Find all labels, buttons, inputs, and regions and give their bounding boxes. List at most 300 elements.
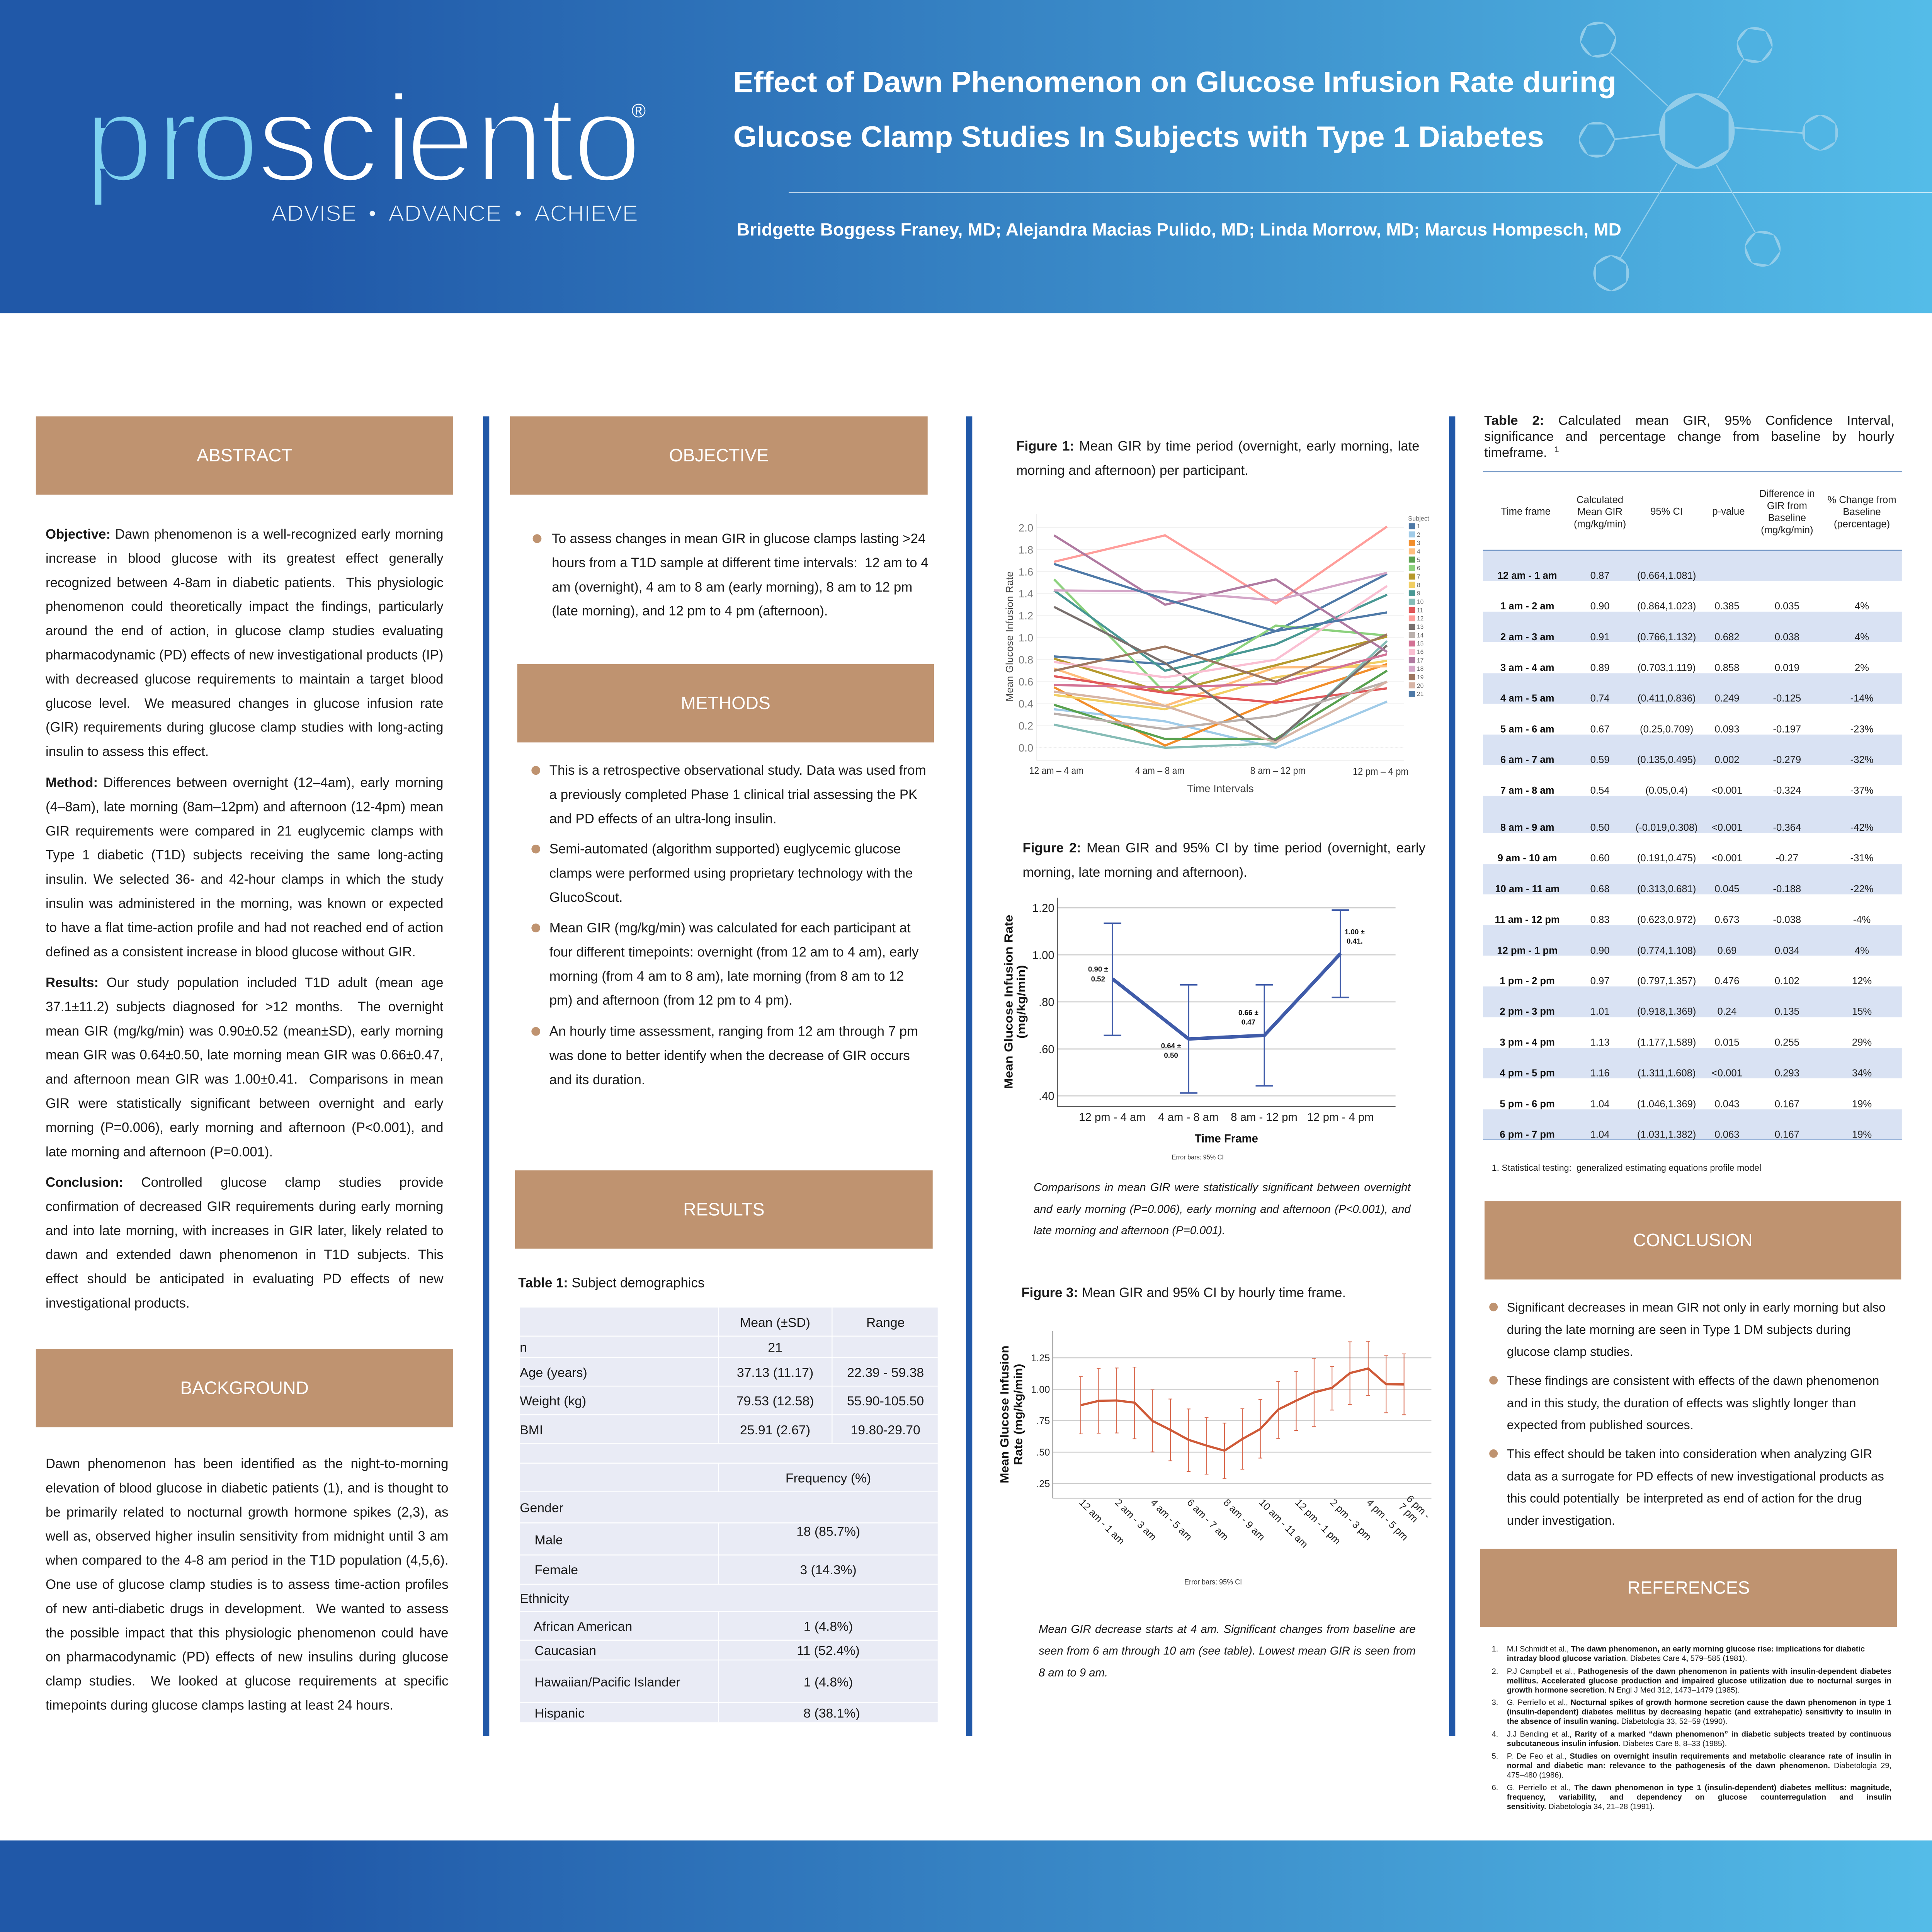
text: abstract results: mean GIR was 0.64±0.50, late morning mean GIR was 0.66±0.47, (46, 1048, 443, 1063)
x axis labels: 12 am – 4 am (1029, 765, 1083, 776)
table 2 difference column: 0.167 (1775, 1098, 1799, 1109)
table 1: subject demographics: Mean (±SD) (740, 1315, 810, 1330)
table 1: subject demographics: 1 (4.8%) (804, 1674, 853, 1689)
table 2 confidence interval column: (0.313,0.681) (1637, 883, 1696, 894)
table 2 caption: significance and percentage change from baseline by hourly (1484, 429, 1894, 444)
table 2 time frame column: 12 am - 1 am (1498, 570, 1557, 581)
text: abstract results: Results: Our study population included T1D adult (mean age (46, 975, 443, 990)
table 2 header: Baseline (1843, 506, 1881, 517)
table 2 difference column: -0.27 (1776, 852, 1798, 864)
table 2 time frame column: 8 am - 9 am (1500, 821, 1554, 833)
text: abstract conclusion: effect should be anticipated in evaluating PD effects of new (46, 1271, 443, 1286)
heading: abstract: ABSTRACT (197, 445, 292, 465)
table 2 confidence interval column: (0.191,0.475) (1637, 852, 1696, 864)
bullet: methods study design: a previously completed Phase 1 clinical trial assessing the PK (549, 787, 917, 802)
text: 3. (1492, 1698, 1498, 1707)
logo tagline (271, 201, 638, 226)
text: abstract objective: glucose level. We measured changes in glucose infusion rate (46, 696, 443, 711)
text: abstract results: morning (P=0.006), early morning and afternoon (P<0.001), and (46, 1120, 443, 1135)
x axis labels: 4 am - 8 am (1158, 1111, 1219, 1124)
mean line (1112, 954, 1340, 1039)
y axis ticks: .50 (1036, 1447, 1050, 1458)
error bars (1104, 910, 1349, 1093)
text: abstract method: GIR requirements were compared in 21 euglycemic clamps with (46, 823, 443, 838)
table 2 header (1501, 488, 1896, 536)
logo tagline: ADVISE (271, 201, 357, 226)
table 2 percent change column: 34% (1852, 1067, 1872, 1078)
logo tagline: ACHIEVE (534, 201, 638, 226)
reference 5: P. De Feo et al., Studies on overnight insulin requirements and metabolic clearance rate of insulin in (1507, 1752, 1891, 1760)
y axis ticks: 0.6 (1019, 676, 1033, 688)
x axis title: Time Frame (1195, 1132, 1258, 1145)
table 2 time frame column: 5 pm - 6 pm (1500, 1098, 1555, 1109)
text: abstract method: insulin. We selected 36- and 42-hour clamps in which the study (46, 872, 443, 887)
legend: subject: Subject (1408, 515, 1429, 522)
y axis ticks (1019, 522, 1033, 754)
table 1: subject demographics: 55.90-105.50 (847, 1393, 924, 1408)
table 2 calculated mean column: 0.87 (1590, 570, 1610, 581)
table 2 percent change column: 19% (1852, 1098, 1872, 1109)
table 1 caption: Table 1: Subject demographics (518, 1276, 704, 1291)
bullet: objective: hours from a T1D sample at different time intervals: 12 am to 4 (552, 555, 929, 570)
x axis labels: 12 pm - 4 am (1079, 1111, 1146, 1124)
table 2 calculated mean column: 0.91 (1590, 631, 1610, 643)
text: abstract method: insulin was administered in the morning, was known or expected (46, 896, 443, 911)
table 1: subject demographics: Male (534, 1532, 563, 1547)
table 2 confidence interval column: (0.05,0.4) (1645, 784, 1688, 796)
bullet: objective: To assess changes in mean GIR in glucose clamps lasting >24 (552, 531, 925, 546)
x axis labels (1079, 1111, 1374, 1124)
text: abstract method: (4–8am), late morning (8am–12pm) and afternoon (12-4pm) mean (46, 799, 443, 815)
y axis ticks: 0.8 (1019, 654, 1033, 666)
table 1: subject demographics: BMI (520, 1422, 543, 1437)
legend: subject: 15 (1417, 641, 1423, 647)
table 1: subject demographics: 25.91 (2.67) (740, 1422, 810, 1437)
table 2 p-value column: 0.015 (1714, 1036, 1739, 1048)
text: abstract objective: increase in blood glucose with its greatest effect generally (46, 551, 443, 566)
table 1: subject demographics: Weight (kg) (520, 1393, 586, 1408)
table 2 confidence interval column: (0.25,0.709) (1640, 723, 1693, 735)
bullet: conclusion consistency: and in this study, the duration of effects was slightly longer than (1507, 1396, 1856, 1410)
legend: subject: 1 (1417, 523, 1420, 530)
figure 2 note (1034, 1177, 1411, 1242)
table 2 percent change column: -42% (1850, 821, 1873, 833)
text: background: clamp studies. We looked at glucose requirements at specific (46, 1673, 448, 1689)
table 1: subject demographics: 8 (38.1%) (803, 1706, 860, 1720)
reference 4: subcutaneous insulin infusion. Diabetes Care 8, 8–33 (1985). (1507, 1740, 1727, 1748)
table 2 time frame column: 4 am - 5 am (1500, 692, 1554, 704)
table 1: subject demographics: 11 (52.4%) (797, 1643, 860, 1658)
table 2 header: Time frame (1501, 506, 1551, 517)
value labels: 0.66 ± (1238, 1009, 1259, 1017)
figure 3 note: Mean GIR decrease starts at 4 am. Significant changes from baseline are (1039, 1622, 1416, 1636)
table 1: subject demographics: Female (534, 1562, 578, 1577)
table 2 percent change column: -4% (1853, 914, 1871, 925)
value labels: 0.64 ± (1161, 1042, 1181, 1050)
table 2 percent change column: 2% (1855, 662, 1869, 673)
bullet: methods hourly assessment: An hourly time assessment, ranging from 12 am through 7 pm (549, 1024, 918, 1039)
figure 3 note: 8 am to 9 am. (1039, 1666, 1108, 1679)
table 2 percent change column: 4% (1855, 945, 1869, 956)
table 2 header: Difference in (1759, 488, 1815, 499)
table 1: subject demographics: 21 (768, 1340, 782, 1355)
figure 2 note: and early morning (P=0.006), early morning and afternoon (P<0.001), and (1034, 1202, 1411, 1215)
table 2 difference column: 0.034 (1775, 945, 1799, 956)
legend: subject: 21 (1417, 691, 1423, 697)
table 2 time frame column: 9 am - 10 am (1498, 852, 1557, 864)
text: 1. (1492, 1645, 1498, 1653)
table 2 header: Baseline (1768, 512, 1806, 523)
table 2 footnote: 1. Statistical testing: generalized estimating equations profile model (1492, 1163, 1761, 1173)
table 2 difference column: -0.279 (1773, 754, 1801, 765)
bullet: methods hourly assessment: and its duration. (549, 1072, 645, 1087)
value labels: 0.90 ± (1088, 965, 1108, 973)
table 2: hourly GIR statistics (1478, 469, 1906, 1145)
heading: background (36, 1349, 453, 1427)
figure 2 note: late morning and afternoon (P=0.001). (1034, 1224, 1225, 1237)
table 2 time frame column: 1 pm - 2 pm (1500, 975, 1555, 986)
table 2 percent change column (1850, 600, 1873, 1140)
legend: subject: 7 (1417, 573, 1420, 580)
table 2 calculated mean column: 0.54 (1590, 784, 1610, 796)
table 2 p-value column: <0.001 (1712, 1067, 1742, 1078)
reference 4: J.J Bending et al., Rarity of a marked “dawn phenomenon” in diabetic subjects treated by continuous (1507, 1730, 1891, 1739)
table 2 difference column (1773, 600, 1801, 1140)
text: abstract results: mean GIR (mg/kg/min) was 0.90±0.52 (mean±SD), early morning (46, 1024, 443, 1039)
table 2 calculated mean column: 0.60 (1590, 852, 1610, 864)
table 1: subject demographics (516, 1305, 940, 1725)
text: abstract method: Type 1 diabetic (T1D) subjects receiving the same long-acting (46, 848, 443, 863)
heading: objective: OBJECTIVE (669, 445, 769, 465)
legend: subject: 6 (1417, 565, 1420, 571)
y axis ticks: 0.0 (1019, 742, 1033, 754)
figure 2: mean GIR line chart with error bars (990, 881, 1446, 1163)
text: abstract results: GIR were statistically significant between overnight and early (46, 1096, 443, 1111)
table 2 confidence interval column (1636, 570, 1698, 1140)
y axis ticks: 1.4 (1019, 588, 1033, 600)
legend: subject: 14 (1417, 633, 1424, 639)
table 2 percent change column: 29% (1852, 1036, 1872, 1048)
x axis labels: 6 am - 7 am (1185, 1497, 1231, 1543)
text: abstract objective: insulin to assess this effect. (46, 744, 209, 759)
table 2 confidence interval column: (0.797,1.357) (1637, 975, 1696, 986)
figure 3 caption: Figure 3: Mean GIR and 95% CI by hourly time frame. (1021, 1285, 1346, 1300)
legend: subject: 13 (1417, 624, 1423, 631)
logo wordmark (84, 68, 646, 208)
text: abstract results: late morning and afternoon (P=0.001). (46, 1144, 273, 1159)
table 2 caption: Table 2: Calculated mean GIR, 95% Confidence Interval, (1484, 413, 1894, 428)
bullet: methods mean GIR: pm) and afternoon (from 12 pm to 4 pm). (549, 993, 793, 1008)
heading: methods (517, 664, 934, 742)
heading: objective (510, 416, 928, 495)
title: Glucose Clamp Studies In Subjects with Type 1 Diabetes (733, 120, 1544, 153)
bullet: methods clamps: Semi-automated (algorithm supported) euglycemic glucose (549, 842, 901, 857)
table 2 time frame column: 7 am - 8 am (1500, 784, 1554, 796)
text: background: the possible impact that this physiologic phenomenon could have (46, 1625, 448, 1640)
table 2 calculated mean column: 1.13 (1590, 1036, 1610, 1048)
x axis labels (1077, 1493, 1432, 1550)
figure 2 caption (1022, 836, 1425, 884)
table 2 calculated mean column: 0.83 (1590, 914, 1610, 925)
bullet: methods mean GIR: four different timepoints: overnight (from 12 am to 4 am), early (549, 944, 918, 960)
table 2 confidence interval column: (-0.019,0.308) (1636, 821, 1698, 833)
table 2 header: % Change from (1827, 494, 1896, 505)
legend: subject: 17 (1417, 658, 1423, 664)
value labels: 0.50 (1164, 1051, 1178, 1060)
value labels: 0.41. (1347, 937, 1363, 945)
table 1: subject demographics: Hispanic (534, 1706, 585, 1720)
legend: subject: 2 (1417, 532, 1420, 538)
table 1: subject demographics: 79.53 (12.58) (736, 1393, 814, 1408)
x axis labels: 2 am - 3 am (1113, 1497, 1159, 1543)
y axis ticks: 1.0 (1019, 632, 1033, 644)
table 2 header: 95% CI (1650, 506, 1683, 517)
title: Effect of Dawn Phenomenon on Glucose Infusion Rate during (733, 65, 1616, 99)
reference 6: G. Perriello et al., The dawn phenomenon in type 1 (insulin-dependent) diabetes mellitus: magnitude, (1507, 1784, 1891, 1792)
table 2 calculated mean column: 1.01 (1590, 1006, 1610, 1017)
reference 6: frequency, variability, and dependency on glucose counterregulation and insulin (1507, 1793, 1891, 1801)
legend: subject: 16 (1417, 649, 1423, 656)
table 2 difference column: -0.188 (1773, 883, 1801, 894)
table 2 difference column: -0.125 (1773, 692, 1801, 704)
table 2 calculated mean column: 0.89 (1590, 662, 1610, 673)
table 2 percent change column: -14% (1850, 692, 1873, 704)
bullet: methods hourly assessment (549, 1019, 918, 1092)
y axis ticks: 1.25 (1031, 1352, 1050, 1364)
table 2 calculated mean column: 0.50 (1590, 821, 1610, 833)
table 2 time frame column: 6 am - 7 am (1500, 754, 1554, 765)
legend: subject: 12 (1417, 616, 1423, 622)
table 2 p-value column: 0.858 (1714, 662, 1739, 673)
table 2 confidence interval column: (0.774,1.108) (1637, 945, 1696, 956)
table 2 calculated mean column: 0.97 (1590, 975, 1610, 986)
table 2 calculated mean column: 0.68 (1590, 883, 1610, 894)
table 1: subject demographics: 37.13 (11.17) (737, 1365, 813, 1380)
y axis ticks (1032, 901, 1054, 1102)
table 2 time frame column: 2 am - 3 am (1500, 631, 1554, 643)
text: abstract conclusion: and into late morning, with increases in GIR later, likely related to (46, 1223, 443, 1238)
text: abstract objective: Objective: Dawn phenomenon is a well-recognized early morning (46, 527, 443, 542)
text: abstract objective (46, 522, 443, 764)
legend: subject: 5 (1417, 557, 1420, 563)
y axis ticks: 1.00 (1032, 949, 1054, 962)
text: abstract objective: (GIR) requirements during glucose clamp studies with long-acting (46, 720, 443, 735)
table 2 header: Calculated (1577, 494, 1623, 505)
bullet: objective: am (overnight), 4 am to 8 am (early morning), 8 am to 12 pm (552, 580, 912, 595)
figure 3: hourly mean GIR line chart (990, 1321, 1446, 1604)
table 2 difference column: 0.167 (1775, 1129, 1799, 1140)
table 2 p-value column: <0.001 (1712, 821, 1742, 833)
table 1: subject demographics: 18 (85.7%) (796, 1524, 860, 1539)
bullet: methods clamps: clamps were performed using proprietary technology with the (549, 866, 913, 881)
bullet: conclusion finding: Significant decreases in mean GIR not only in early morning but also (1507, 1301, 1886, 1315)
y axis title: Rate (mg/kg/min) (1012, 1364, 1025, 1465)
bullet: conclusion consistency: These findings are consistent with effects of the dawn phenomenon (1507, 1374, 1879, 1388)
table 2 confidence interval column: (0.411,0.836) (1638, 692, 1696, 704)
legend: subject: 9 (1417, 590, 1420, 597)
bullet: conclusion implication: This effect should be taken into consideration when analyzing GIR (1507, 1447, 1872, 1461)
table 2 calculated mean column: 1.04 (1590, 1129, 1610, 1140)
text: abstract conclusion: Conclusion: Controlled glucose clamp studies provide (46, 1175, 443, 1190)
table 2 calculated mean column: 0.74 (1590, 692, 1610, 704)
legend: subject: 8 (1417, 582, 1420, 588)
reference 6: sensitivity. Diabetologia 34, 21–28 (1991). (1507, 1803, 1655, 1811)
table 2 confidence interval column: (1.177,1.589) (1637, 1036, 1696, 1048)
table 1: subject demographics: Range (866, 1315, 905, 1330)
bullet: conclusion finding (1507, 1296, 1886, 1363)
x axis labels: 4 am – 8 am (1135, 765, 1185, 776)
y axis title: Mean Glucose Infusion (998, 1345, 1011, 1483)
table 2 difference column: 0.019 (1775, 662, 1799, 673)
y axis ticks: 0.2 (1019, 720, 1033, 732)
table 2 time frame column: 11 am - 12 pm (1495, 914, 1560, 925)
heading: conclusion (1485, 1201, 1901, 1279)
bullet: objective: (late morning), and 12 pm to 4 pm (afternoon). (552, 604, 828, 619)
table 1: subject demographics: 1 (4.8%) (804, 1619, 853, 1634)
text: abstract results (46, 971, 443, 1164)
table 2 header: (mg/kg/min) (1761, 524, 1813, 536)
table 2 difference column: 0.135 (1775, 1006, 1799, 1017)
mean line (1081, 1369, 1404, 1451)
table 2 confidence interval column: (0.703,1.119) (1638, 662, 1696, 673)
table 1: subject demographics: Gender (520, 1500, 563, 1515)
header banner (0, 0, 1932, 313)
value labels: 0.47 (1242, 1018, 1255, 1026)
logo wordmark: pro (84, 68, 259, 208)
table 2 p-value column: 0.673 (1714, 914, 1739, 925)
figure 2 caption: morning, late morning and afternoon). (1022, 865, 1247, 880)
table 2 header: GIR from (1767, 500, 1807, 511)
reference 3: G. Perriello et al., Nocturnal spikes of growth hormone secretion cause the dawn phenomenon in type 1 (1507, 1698, 1891, 1707)
table 2 confidence interval column: (0.623,0.972) (1637, 914, 1696, 925)
table 2 p-value column: 0.063 (1714, 1129, 1739, 1140)
text: background: timepoints during glucose clamps lasting at least 24 hours. (46, 1698, 393, 1713)
table 2 confidence interval column: (0.135,0.495) (1637, 754, 1696, 765)
text: abstract conclusion: dawn and extended dawn phenomenon in T1D subjects. This (46, 1247, 443, 1262)
bullet: objective (552, 527, 929, 623)
text: abstract conclusion: investigational products. (46, 1296, 190, 1311)
table 2 time frame column (1495, 570, 1560, 1140)
table 2 confidence interval column: (1.031,1.382) (1637, 1129, 1696, 1140)
table 2 calculated mean column: 0.59 (1590, 754, 1610, 765)
heading: methods: METHODS (681, 693, 770, 713)
x axis labels: 4 am - 5 am (1148, 1497, 1194, 1543)
reference 2: growth hormone secretion. N Engl J Med 312, 1473–1479 (1985). (1507, 1686, 1740, 1695)
reference 4 (1507, 1730, 1891, 1749)
value labels: 0.52 (1091, 975, 1105, 983)
table 2 p-value column: 0.682 (1714, 631, 1739, 643)
table 2 time frame column: 3 am - 4 am (1500, 662, 1554, 673)
error bars (1079, 1341, 1406, 1479)
table 2 difference column: -0.197 (1773, 723, 1801, 735)
table 2 caption: timeframe. 1 (1484, 445, 1559, 460)
table 2 difference column: -0.364 (1773, 821, 1801, 833)
figure 1 caption: Figure 1: Mean GIR by time period (overnight, early morning, late (1016, 439, 1420, 454)
table 2 p-value column: 0.476 (1714, 975, 1739, 986)
text: abstract method (46, 771, 443, 964)
table 2 header: (percentage) (1834, 518, 1890, 529)
bullet: methods clamps (549, 837, 913, 910)
y axis ticks: .75 (1036, 1415, 1050, 1426)
text: background: One use of glucose clamp studies is to assess time-action profiles (46, 1577, 448, 1592)
text: abstract objective: with decreased glucose requirements to maintain a target blood (46, 672, 443, 687)
table 2 p-value column: 0.69 (1717, 945, 1736, 956)
reference 5: normal and diabetic man: relevance to the pathogenesis of the dawn phenomenon. Diabetologia 29, (1507, 1762, 1891, 1770)
y axis ticks: 0.4 (1019, 698, 1033, 710)
x axis labels: 2 pm - 3 pm (1328, 1497, 1374, 1543)
reference 2: mellitus. Accelerated glucose production and impaired glucose utilization due to nocturnal surges in (1507, 1677, 1891, 1685)
y axis ticks: 1.20 (1032, 901, 1054, 915)
heading: results (515, 1170, 933, 1249)
x axis labels: 6 pm - (1404, 1493, 1432, 1521)
reference 3: (insulin-dependent) diabetes mellitus by decreasing hepatic (and extrahepatic) sensitivity to insulin in (1507, 1708, 1891, 1716)
y axis ticks: 1.6 (1019, 566, 1033, 578)
value labels: 1.00 ± (1345, 928, 1365, 936)
text: background (46, 1452, 448, 1718)
table 1: subject demographics: 3 (14.3%) (800, 1562, 857, 1577)
y axis ticks: 1.8 (1019, 544, 1033, 556)
bullet: methods study design: This is a retrospective observational study. Data was used from (549, 763, 926, 778)
text: 5. (1492, 1752, 1498, 1760)
text: 6. (1492, 1784, 1498, 1792)
figure 1 caption (1016, 434, 1420, 483)
table 2 time frame column: 10 am - 11 am (1495, 883, 1560, 894)
table 2 time frame column: 3 pm - 4 pm (1500, 1036, 1555, 1048)
text: background: when compared to the 4-8 am period in the T1D population (4,5,6). (46, 1553, 448, 1568)
bullet: methods mean GIR: morning (from 4 am to 8 am), late morning (from 8 am to 12 (549, 969, 904, 984)
table 2 difference column: -0.038 (1773, 914, 1801, 925)
table 2 calculated mean column: 0.67 (1590, 723, 1610, 735)
table 2 percent change column: 15% (1852, 1006, 1872, 1017)
legend: subject: 19 (1417, 674, 1423, 681)
text: abstract method: defined as a consistent increase in blood glucose without GIR. (46, 944, 416, 959)
text: background: elevation of blood glucose in diabetic patients (1), and is thought to (46, 1480, 448, 1495)
x axis labels: 8 am - 12 pm (1231, 1111, 1298, 1124)
y axis ticks: 2.0 (1019, 522, 1033, 534)
table 1: subject demographics: Hawaiian/Pacific Islander (534, 1674, 680, 1689)
reference 2 (1507, 1667, 1891, 1695)
table 2 confidence interval column: (0.664,1.081) (1637, 570, 1696, 581)
figure 3 note: seen from 6 am through 10 am (see table). Lowest mean GIR is seen from (1039, 1644, 1416, 1657)
reference 1 (1507, 1645, 1891, 1663)
legend: subject: 4 (1417, 548, 1420, 555)
x axis labels: 12 pm - 4 pm (1307, 1111, 1374, 1124)
legend: subject: 10 (1417, 599, 1423, 605)
logo tagline: ADVANCE (388, 201, 502, 226)
table 2 p-value column: 0.043 (1714, 1098, 1739, 1109)
bullet: conclusion implication (1507, 1443, 1884, 1532)
table 2 confidence interval column: (1.311,1.608) (1638, 1067, 1696, 1078)
heading: results: RESULTS (683, 1199, 765, 1219)
reference 1: M.I Schmidt et al., The dawn phenomenon, an early morning glucose rise: implications for diabetic (1507, 1645, 1865, 1653)
table 2 difference column: 0.255 (1775, 1036, 1799, 1048)
table 1: subject demographics: 19.80-29.70 (851, 1422, 920, 1437)
table 2 calculated mean column: 1.04 (1590, 1098, 1610, 1109)
text: background: on pharmacodynamic (PD) effects of new insulins during glucose (46, 1650, 448, 1665)
table 2 p-value column: <0.001 (1712, 852, 1742, 864)
icon: molecule network (1577, 20, 1838, 291)
x axis labels: 12 pm – 4 pm (1353, 766, 1408, 777)
table 1: subject demographics: Caucasian (534, 1643, 596, 1658)
bullet: conclusion implication: under investigation. (1507, 1514, 1615, 1527)
table 2 header: Mean GIR (1577, 506, 1622, 517)
figure 3 note (1039, 1618, 1416, 1683)
heading: background: BACKGROUND (180, 1378, 309, 1398)
table 2 percent change column: -22% (1850, 883, 1873, 894)
x axis labels: 10 am - 11 am (1257, 1497, 1310, 1550)
text: abstract objective: phenomenon could theoretically impact the findings, particularly (46, 599, 443, 614)
heading: references: REFERENCES (1628, 1578, 1750, 1598)
